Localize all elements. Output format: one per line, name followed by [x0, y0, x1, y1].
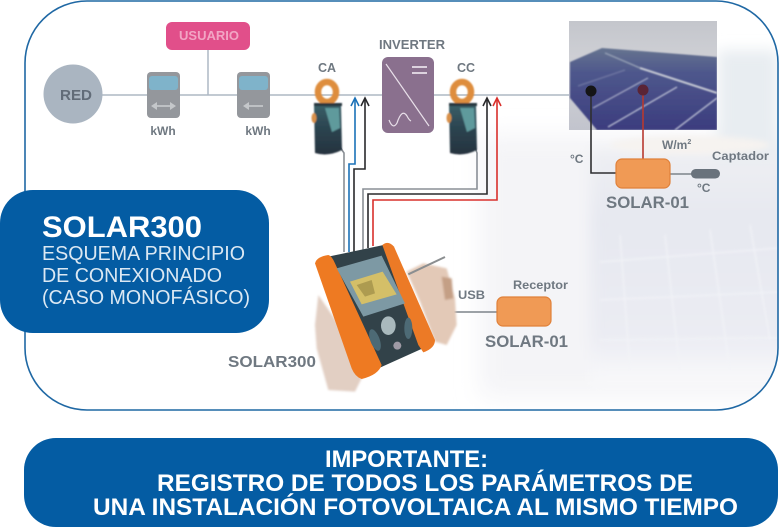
- sensor wires: [591, 90, 692, 174]
- clamp meter: CA: [312, 61, 342, 154]
- body: [328, 245, 427, 368]
- panel: SOLAR300 title: ESQUEMA PRINCIPIO: [42, 242, 245, 265]
- sensor: Captador: [691, 151, 770, 195]
- node: RED: [44, 64, 102, 124]
- receiver box: SOLAR-01 upper: SOLAR-01: [606, 194, 689, 212]
- panel: SOLAR300 title: (CASO MONOFÁSICO): [42, 286, 250, 309]
- outer frame: [25, 1, 778, 410]
- icon: bidirectional kWh meter: [147, 72, 180, 138]
- clamp meter: CC: [446, 61, 477, 154]
- sensor: Captador: °C: [697, 181, 711, 195]
- label: USB: USB: [458, 288, 485, 302]
- receiver box: SOLAR-01 lower: Receptor: [513, 278, 568, 292]
- label: W/m2: 2: [687, 139, 691, 146]
- banner: IMPORTANTE: REGISTRO DE TODOS LOS PARÁMETROS DE: [157, 469, 693, 497]
- inverter: INVERTER: [379, 37, 446, 52]
- receiver box: SOLAR-01 lower: [485, 278, 568, 351]
- hands: [315, 263, 457, 392]
- icon: export kWh meter: kWh: [245, 124, 271, 138]
- panel: SOLAR300 title: DE CONEXIONADO: [42, 264, 222, 287]
- button: USUARIO: [166, 22, 250, 50]
- receiver box: SOLAR-01 lower: SOLAR-01: [485, 333, 568, 351]
- background: faded solar field photo: [488, 48, 778, 389]
- bezel: [337, 256, 405, 317]
- node: RED: RED: [60, 87, 92, 104]
- clamp meter: CC: CC: [457, 61, 475, 75]
- panel: SOLAR300 title: SOLAR300: [42, 211, 202, 244]
- screen: [350, 272, 397, 304]
- sensor: Captador: Captador: [712, 151, 770, 163]
- banner: IMPORTANTE: [24, 438, 778, 527]
- sensor points: [586, 84, 648, 96]
- label: °C: °C: [570, 152, 584, 166]
- keypad: [367, 316, 412, 352]
- icon: bidirectional kWh meter: kWh: [150, 124, 176, 138]
- photo: solar panel: [569, 21, 717, 130]
- inverter: [379, 37, 446, 133]
- orange bumpers: [315, 255, 382, 379]
- label: SOLAR300: SOLAR300: [228, 354, 316, 371]
- clamp meter: CA: CA: [318, 61, 336, 75]
- stylus: [408, 257, 445, 274]
- USB cable: [454, 311, 497, 313]
- receiver box: SOLAR-01 upper: [606, 159, 689, 212]
- icon: export kWh meter: [237, 72, 271, 138]
- label: W/m2: W/m: [662, 138, 687, 152]
- grid line: [100, 50, 569, 95]
- wires from clamps to instrument: [340, 98, 501, 252]
- banner: IMPORTANTE: IMPORTANTE:: [325, 446, 488, 473]
- panel: SOLAR300 title: [0, 190, 269, 333]
- banner: IMPORTANTE: UNA INSTALACIÓN FOTOVOLTAICA AL MISMO TIEMPO: [93, 493, 738, 521]
- button: USUARIO: USUARIO: [179, 29, 239, 43]
- instrument: SOLAR300 held in hands: [315, 243, 457, 392]
